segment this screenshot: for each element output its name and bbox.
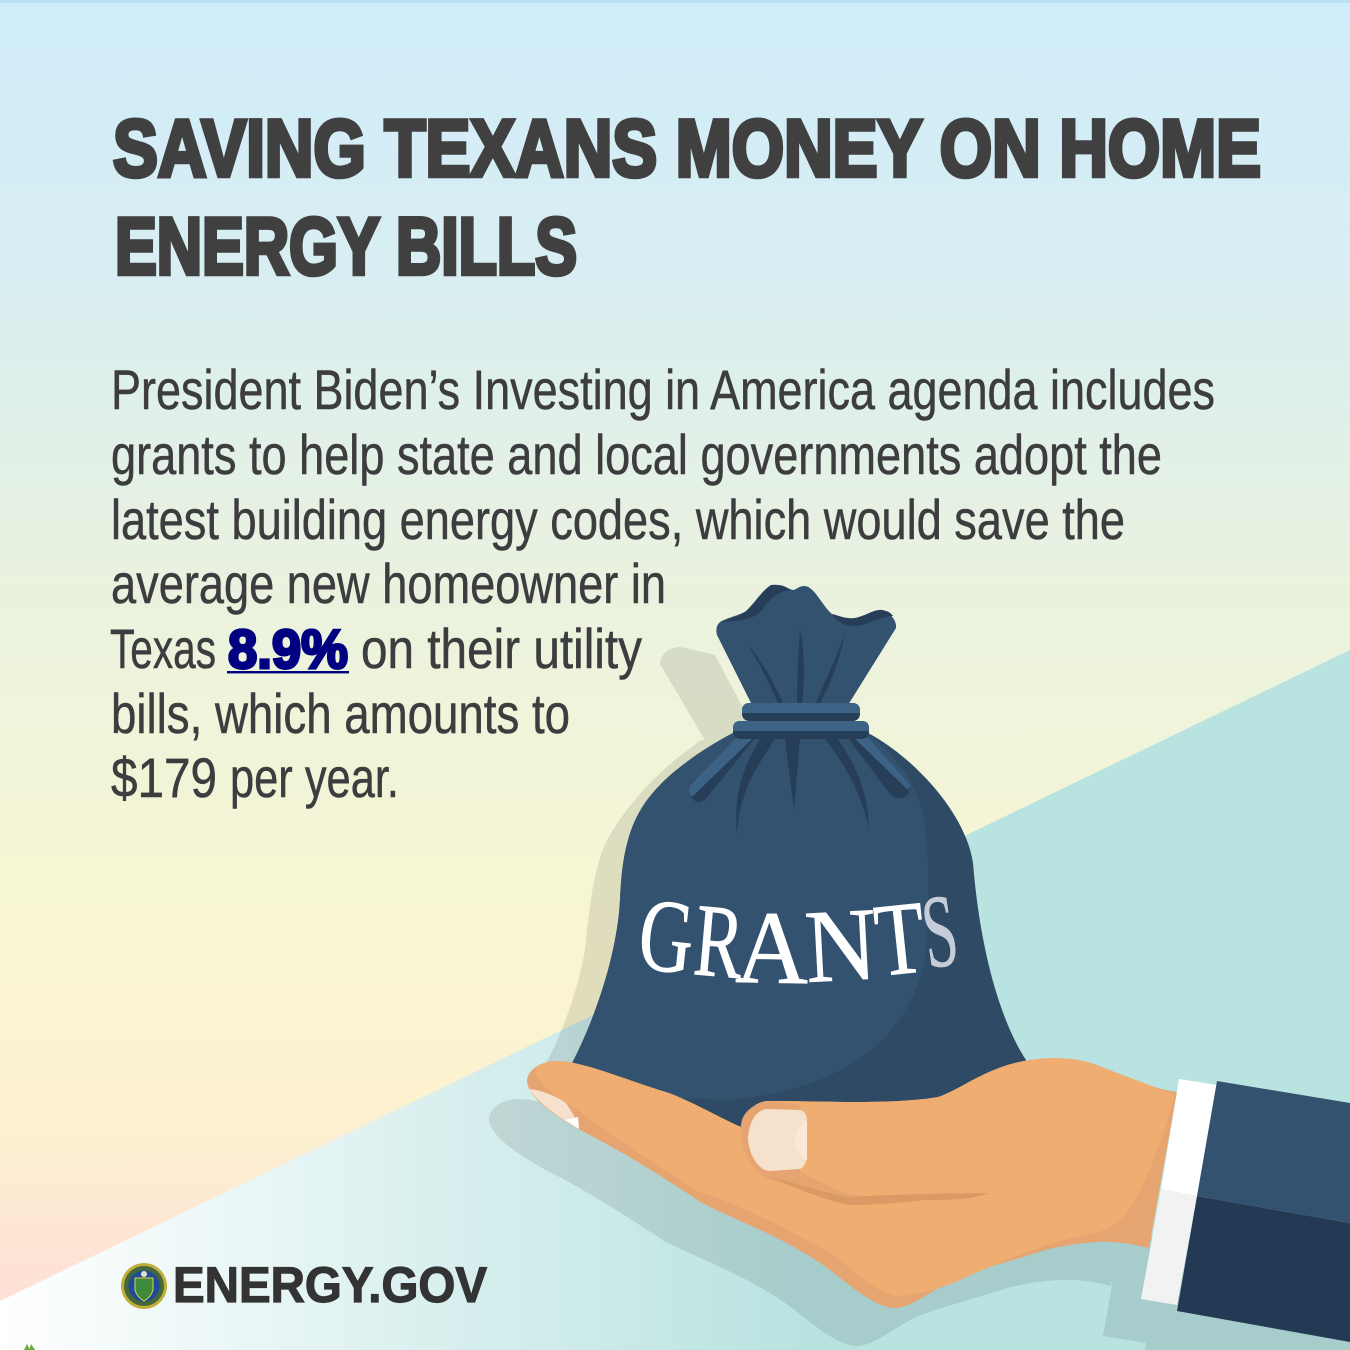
shadow of bag and hand bbox=[489, 647, 1350, 1350]
illustration: shirt cuff bbox=[1141, 1079, 1217, 1305]
illustration: hand bbox=[527, 1058, 1177, 1308]
body text: latest building energy codes, which would save the bbox=[111, 488, 1125, 551]
label: GRANTS: R bbox=[690, 883, 748, 1001]
bag body creases bbox=[736, 739, 869, 835]
body text: average new homeowner in bbox=[111, 552, 666, 615]
label: GRANTS: G bbox=[634, 876, 699, 996]
tie rope upper bbox=[742, 703, 860, 721]
illustration: suit sleeve bbox=[1177, 1081, 1350, 1342]
bag top folds bbox=[720, 585, 893, 626]
bag right tie end bbox=[848, 735, 909, 798]
label: GRANTS: T bbox=[869, 880, 931, 999]
label: GRANTS bbox=[634, 872, 964, 1007]
bag neck creases bbox=[748, 629, 845, 703]
wordmark: ENERGY.GOV bbox=[173, 1257, 488, 1313]
bag left tie end bbox=[690, 735, 755, 802]
title bbox=[113, 104, 1261, 292]
label: GRANTS: S bbox=[915, 872, 964, 991]
illustration: money bag bbox=[560, 585, 1026, 1130]
highlighted statistic: 8.9% bbox=[228, 618, 348, 680]
body text: Texas bbox=[110, 617, 216, 680]
hand main bbox=[535, 1058, 1175, 1296]
tie rope lower bbox=[733, 721, 869, 739]
thumb shade bbox=[741, 1101, 860, 1202]
thumb nail bbox=[748, 1109, 807, 1171]
body text: bills, which amounts to bbox=[111, 682, 570, 745]
background diagonal panel bbox=[0, 650, 1350, 1350]
title: ENERGY BILLS bbox=[115, 202, 577, 292]
icon: small green mark bbox=[24, 1344, 35, 1350]
label: GRANTS: A bbox=[735, 891, 809, 1007]
body text: on their utility bbox=[361, 617, 642, 680]
bag lighter area bbox=[571, 733, 929, 1100]
label: GRANTS: N bbox=[802, 886, 879, 1005]
hand shaded base bbox=[527, 1058, 1177, 1308]
palm crease bbox=[769, 1176, 989, 1205]
icon: department of energy seal bbox=[121, 1263, 167, 1309]
body text: $179 bbox=[111, 746, 217, 809]
logo: energy.gov bbox=[121, 1257, 488, 1313]
body text: per year. bbox=[230, 746, 399, 809]
body text bbox=[110, 358, 1215, 809]
finger nail bbox=[529, 1089, 579, 1129]
bag neck bbox=[716, 585, 896, 705]
bag body bbox=[560, 733, 1026, 1130]
